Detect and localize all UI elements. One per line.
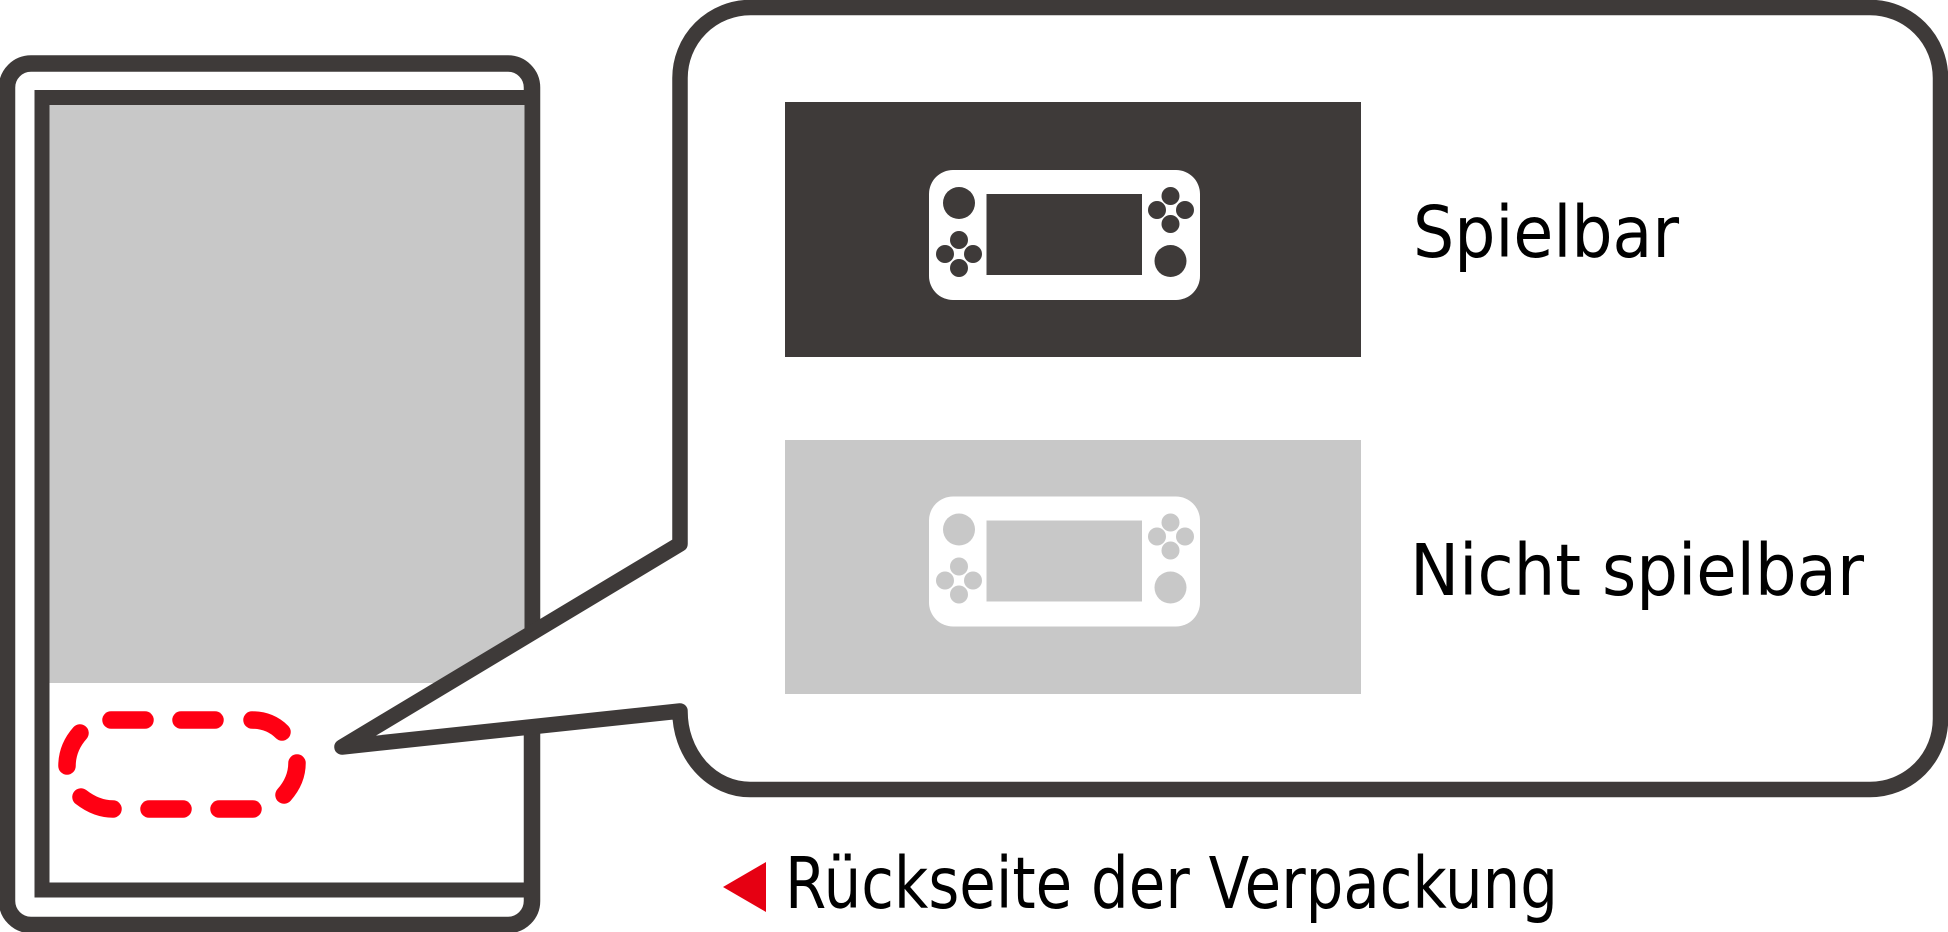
package inner frame <box>42 98 532 890</box>
caption: back of packaging: Rückseite der Verpackung <box>785 842 1558 925</box>
package outer case <box>7 64 532 925</box>
icon: handheld console, not playable <box>929 496 1200 626</box>
grey background <box>785 440 1361 694</box>
package illustration <box>7 64 532 925</box>
icon: red arrow marker <box>723 862 766 912</box>
callout bubble <box>342 8 1940 790</box>
playable icon panel <box>785 102 1361 357</box>
package cover art area <box>49 105 525 683</box>
label: playable: Spielbar <box>1413 191 1680 274</box>
highlighted icon area: red dashed outline <box>67 720 297 809</box>
dark background <box>785 102 1361 357</box>
icon: handheld console, playable <box>929 170 1200 300</box>
label: not playable: Nicht spielbar <box>1410 529 1865 612</box>
not playable icon panel <box>785 440 1361 694</box>
